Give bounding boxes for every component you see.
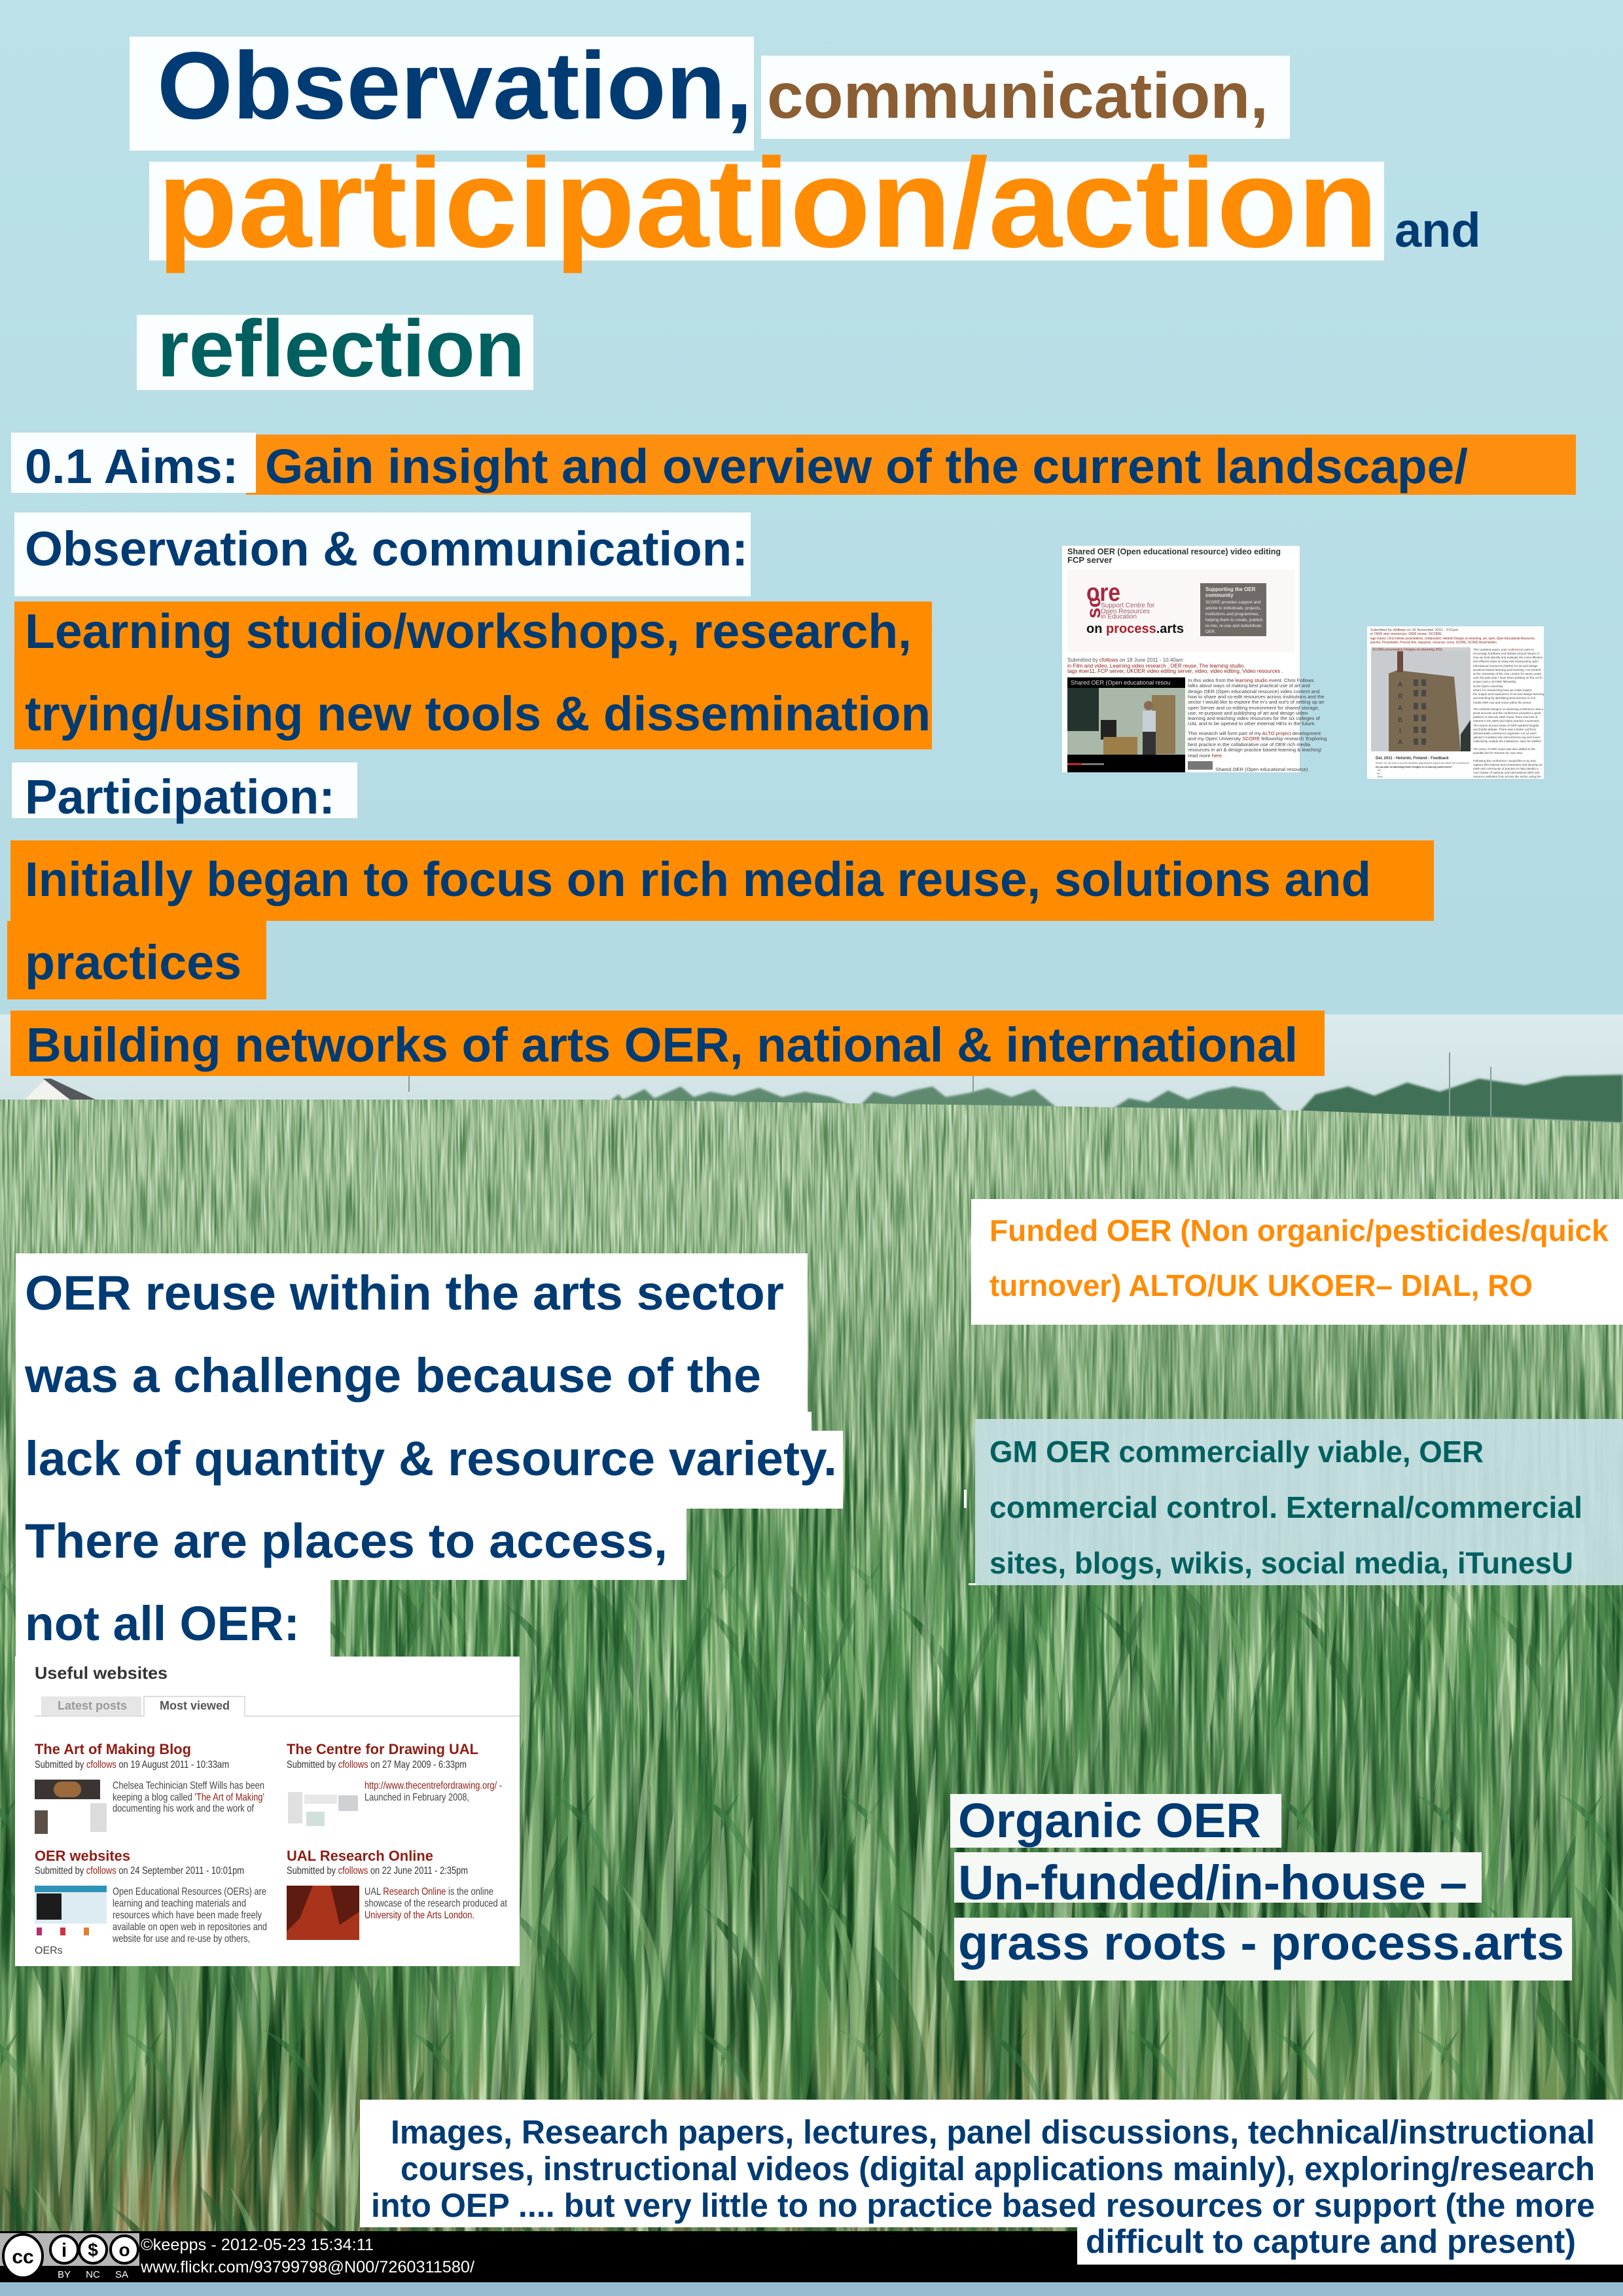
callout: GM OER: commercial control. External/commercial	[990, 1490, 1582, 1524]
photo credit text: ©keepps - 2012-05-23 15:34:11	[141, 2236, 374, 2254]
callout: bottom resources text: into OEP .... but very little to no practice based resources or support (the more	[371, 2187, 1595, 2224]
screenshot: shared OER video editing: ore	[1086, 579, 1120, 607]
callout: funded OER: Funded OER (Non organic/pesticides/quick	[990, 1213, 1609, 1247]
creative commons badge: SA	[115, 2269, 128, 2280]
panel heading: Useful websites	[35, 1663, 168, 1683]
title: Observation: Observation,	[157, 32, 753, 139]
screenshot: OER presentation Arabia tower: A	[1398, 739, 1402, 746]
screenshot: shared OER video editing: FCP server	[1067, 555, 1112, 565]
screenshot: OER presentation Arabia tower: possible list for Themes for next Year.	[1473, 751, 1523, 755]
screenshot: shared OER video editing: how to share and co-edit resources across institutions and the	[1188, 694, 1325, 700]
screenshot: OER presentation Arabia tower: Do you plan on attending future Designs on eLearning conferences?	[1376, 766, 1452, 768]
screenshot: OER presentation Arabia tower: B	[1398, 717, 1402, 724]
screenshot: OER presentation Arabia tower: This Updated paper, post conference) aims to	[1473, 648, 1534, 651]
screenshot: shared OER video editing: read more here.	[1188, 753, 1223, 759]
screenshot: OER presentation Arabia tower: and teaching by identifying best practice in rich	[1473, 696, 1536, 700]
photo credit text	[140, 2236, 474, 2276]
entry: art of making: The Art of Making Blog	[35, 1741, 191, 1757]
callout: bottom resources text: Images, Research papers, lectures, panel discussions, technical/instructional	[391, 2113, 1595, 2151]
poles	[409, 1052, 1491, 1119]
field base	[0, 1100, 1623, 2232]
screenshot: OER presentation Arabia tower: I	[1399, 728, 1401, 735]
callout: funded OER: turnover) ALTO/UK UKOER– DIAL, RO	[990, 1268, 1533, 1302]
screenshot: shared OER video editing: Support Centre for	[1101, 602, 1155, 609]
entry: OER websites: available on open web in repositories and	[113, 1922, 267, 1933]
entry: art of making: Submitted by cfollows on 19 August 2011 - 10:33am	[35, 1759, 229, 1770]
screenshot: shared OER video editing: community	[1205, 592, 1234, 598]
screenshot: OER presentation Arabia tower: SCORE presentation Designs on elearning 2011	[1372, 648, 1442, 652]
screenshot: OER presentation Arabia tower: project and a SCORE fellowship	[1473, 680, 1516, 683]
creative commons badge: $	[88, 2240, 98, 2260]
far field texture	[0, 1100, 1623, 1513]
screenshot: OER presentation Arabia tower: where I'm researching how we make explicit	[1473, 689, 1532, 692]
screenshot: OER presentation Arabia tower: R	[1398, 693, 1402, 700]
entry: centre for drawing: Submitted by cfollows on 27 May 2009 - 6:33pm	[287, 1759, 467, 1770]
callout: OER reuse challenge: was a challenge because of the	[24, 1348, 761, 1403]
callout: organic OER: Organic OER	[958, 1793, 1261, 1848]
entry: UAL research online: UAL Research Online	[287, 1848, 433, 1864]
entry: OER websites: learning and teaching materials and	[113, 1898, 246, 1909]
screenshot: OER presentation Arabia tower: encourage feedback and debate around issues of	[1473, 652, 1540, 655]
entry: art of making: documenting his work and the work of	[113, 1803, 254, 1814]
creative commons badge: i	[62, 2240, 67, 2261]
entry: OER websites: OERs	[35, 1945, 63, 1956]
entry: centre for drawing: The Centre for Drawing UAL	[287, 1741, 478, 1757]
creative commons badge	[0, 2233, 139, 2280]
learning studio text: trying/using new tools & dissemination	[25, 687, 931, 741]
screenshot: shared OER video editing	[1062, 546, 1327, 772]
screenshot: OER presentation Arabia tower: platform to discuss OER reuse, there was lots of	[1473, 715, 1538, 719]
callout: organic OER	[950, 1793, 1572, 1981]
aims text: Gain insight and overview of the current landscape/	[265, 439, 1468, 493]
tonal areas	[0, 1100, 1623, 2238]
screenshot: shared OER video editing: re-mix, re-use and redistribute	[1205, 624, 1262, 628]
entry: art of making: keeping a blog called 'The Art of Making'	[113, 1792, 264, 1803]
tabs: Latest posts	[58, 1699, 127, 1712]
screenshot: shared OER video editing: Shared OER (Open educational resou	[1071, 679, 1170, 686]
creative commons badge: NC	[86, 2269, 100, 2280]
screenshot: OER presentation Arabia tower: Del, 2011 - Helsinki, Finland - Feedback	[1376, 757, 1449, 761]
entry: UAL research online: UAL Research Online is the online	[365, 1886, 493, 1897]
screenshot: OER presentation Arabia tower: in OER arts resources, OER reuse, SCORE.	[1370, 632, 1443, 636]
screenshot: shared OER video editing: helping them to create, publish,	[1205, 618, 1264, 622]
screenshot: OER presentation Arabia tower: core cluster of national and international OER arts	[1473, 771, 1540, 774]
screenshot: shared OER video editing: SCORE provides support and	[1205, 600, 1261, 605]
callout: organic OER: Un-funded/in-house –	[958, 1856, 1467, 1910]
screenshot: OER presentation Arabia tower: collectively outside the institutions, said me #delhel	[1473, 740, 1541, 743]
screenshot: OER presentation Arabia tower: how we best identify and evaluate the most effective	[1473, 656, 1543, 659]
screenshot: shared OER video editing: sc	[1083, 597, 1105, 619]
screenshot: OER presentation Arabia tower: at the Open University	[1473, 685, 1503, 688]
title: communication: communication,	[767, 60, 1268, 132]
participation text: rich media reuse: Initially began to focus on rich media reuse, solutions and	[25, 852, 1371, 906]
tabs	[35, 1696, 520, 1716]
observation and communication heading	[14, 512, 751, 596]
near field texture	[0, 1636, 1623, 2232]
screenshot: shared OER video editing: advice to individuals, projects,	[1205, 606, 1261, 611]
screenshot: shared OER video editing: learning and teaching video resources for the six colleges of	[1188, 715, 1321, 721]
photo: wheat field	[0, 1014, 1623, 2238]
callout: bottom resources text	[360, 2100, 1623, 2265]
screenshot: OER presentation Arabia tower: A	[1398, 705, 1402, 712]
screenshot: shared OER video editing: in Education	[1101, 613, 1137, 620]
screenshot: shared OER video editing: UAL and to be opened to other external HEIs in the future.	[1188, 721, 1316, 726]
learning studio text	[14, 601, 932, 749]
aims	[11, 433, 1576, 495]
screenshot: OER presentation Arabia tower: upload 2 modules into oercommons.org and move	[1473, 736, 1541, 739]
entry: OER websites: website for use and re-use by others,	[112, 1933, 250, 1945]
house	[22, 1079, 98, 1102]
entry: OER websites: Open Educational Resources (OERs) are	[113, 1886, 266, 1897]
entry: centre for drawing	[287, 1741, 502, 1826]
screenshot: OER presentation Arabia tower: No	[1377, 772, 1380, 775]
distant trees	[605, 1075, 1623, 1123]
screenshot: shared OER video editing: talks about ways of making best practical use of art and	[1188, 683, 1310, 689]
screenshot: OER presentation Arabia tower: practiced based learning and teaching. I've worked	[1473, 668, 1541, 672]
screenshot: OER presentation Arabia tower: tags #ukoer, Chris Follows presentations, collaboration, Helsinki Designs on elearning, oer, open, Open Educational Resources,	[1370, 637, 1535, 641]
screenshot: OER presentation Arabia tower: Following the conference I would like to try and	[1473, 759, 1536, 762]
screenshot: OER presentation Arabia tower: over the past year I have been working on the ALTO	[1473, 676, 1543, 679]
screenshot: OER presentation Arabia tower: Other	[1377, 776, 1383, 778]
entry: centre for drawing: http://www.thecentrefordrawing.org/ -	[365, 1780, 502, 1791]
participation text: rich media reuse	[7, 840, 1434, 999]
creative commons badge: o	[118, 2240, 130, 2260]
callout: OER reuse challenge	[16, 1253, 843, 1657]
screenshot: shared OER video editing: In this video from the learning studio event, Chris Follows	[1188, 677, 1314, 683]
entry: UAL research online: Submitted by cfollows on 22 June 2011 - 2:35pm	[287, 1865, 468, 1876]
callout: OER reuse challenge: OER reuse within the arts sector	[25, 1266, 784, 1320]
bottom strip	[0, 2282, 1623, 2296]
screenshot: shared OER video editing: Submitted by cfollows on 18 June 2011 - 10:40am	[1067, 657, 1183, 663]
screenshot: OER presentation Arabia tower: The issues around reuse of OER sparked lengthy	[1473, 724, 1539, 727]
entry: UAL research online: showcase of the research produced at	[365, 1898, 507, 1909]
entry: OER websites: resources which have been made freely	[113, 1910, 262, 1921]
screenshot: shared OER video editing: on process.arts	[1086, 622, 1184, 636]
mid field texture	[0, 1289, 1623, 1852]
photo sky	[0, 1014, 1623, 1126]
screenshot: OER presentation Arabia tower: capture this interest and momentum and develop an	[1473, 763, 1543, 766]
tabs: Most viewed	[160, 1699, 230, 1712]
screenshot: OER presentation Arabia tower: The issue of OER reuse was also added to the	[1473, 747, 1535, 751]
screenshot: shared OER video editing: design OER (Open educational resource) video content and	[1188, 689, 1319, 694]
entry: UAL research online: University of the Arts London.	[365, 1910, 474, 1921]
callout: OER reuse challenge: not all OER:	[25, 1596, 300, 1651]
entry: art of making	[35, 1741, 264, 1834]
screenshot: OER presentation Arabia tower: resource websites from across the sector using the	[1473, 775, 1541, 778]
title: and: and	[1395, 203, 1481, 257]
screenshot: shared OER video editing: tags #oer11, FCP server, UKOER video editing server, video, video editing, Video resources .	[1067, 668, 1283, 674]
screenshot: OER presentation Arabia tower: media OER use and reuse within the sector.	[1473, 701, 1532, 704]
callout: bottom resources text: difficult to capture and present)	[1086, 2223, 1576, 2260]
callout: OER reuse challenge: There are places to access,	[25, 1514, 668, 1568]
title: reflection: reflection	[157, 304, 525, 394]
screenshot: OER presentation Arabia tower: interest in the OER and Open practice movement.	[1473, 719, 1540, 723]
screenshot: shared OER video editing: in Film and video, Learning video research , OER reuse, The learning studio.	[1067, 663, 1245, 669]
screenshot: OER presentation Arabia tower: OER arts community of practice to help identify a	[1473, 767, 1539, 770]
screenshot: shared OER video editing: Supporting the OER	[1205, 586, 1256, 592]
participation text: networks: Building networks of arts OER, national & international	[26, 1018, 1298, 1072]
screenshot: shared OER video editing: best practice in the collaborative use of OER rich media	[1188, 742, 1311, 747]
screenshot: shared OER video editing: open Server and co-editing environment for shared storage,	[1188, 705, 1319, 711]
callout: bottom resources text: courses, instructional videos (digital applications mainly), exploring/research	[401, 2150, 1595, 2187]
learning studio text: Learning studio/workshops, research,	[25, 604, 912, 658]
screenshot: OER presentation Arabia tower: @OwenKelly conference organiser 'Let us each	[1473, 732, 1537, 735]
screenshot: shared OER video editing: and my Open University SCORE fellowship research 'Exploring	[1188, 736, 1327, 742]
screenshot: OER presentation Arabia tower: the unique tacit experience of art and design learning	[1473, 692, 1544, 696]
entry: centre for drawing: Launched in February 2008,	[365, 1792, 469, 1803]
creative commons badge: BY	[58, 2269, 71, 2280]
screenshot: shared OER video editing: Shared OER (Open educational resource) video editing	[1067, 547, 1281, 556]
screenshot: OER presentation Arabia tower: and efficient ways of using and repurposing open	[1473, 660, 1539, 663]
title: participation/action: participation/action	[157, 132, 1378, 274]
callout: GM OER: GM OER commercially viable, OER	[990, 1435, 1484, 1469]
blades	[0, 1407, 1623, 2232]
callout: funded OER	[971, 1199, 1623, 1325]
screenshot: shared OER video editing: This research will form part of my ALTO project development	[1188, 730, 1321, 736]
soil patches	[112, 2083, 982, 2231]
panel: useful websites screenshot	[15, 1657, 520, 1966]
screenshot: OER presentation Arabia tower: The Helsinki Designs on elearning conference was a	[1473, 708, 1543, 711]
screenshot: OER presentation Arabia tower: Please use the form to provide feedback regarding the papers and future Del conferences	[1376, 762, 1469, 764]
observation and communication heading: Observation & communication:	[25, 522, 748, 576]
callout: GM OER: sites, blogs, wikis, social media, iTunesU	[990, 1546, 1573, 1580]
participation heading: Participation:	[25, 770, 335, 824]
screenshot: OER presentation Arabia tower: Yes	[1377, 769, 1381, 772]
callout: organic OER: grass roots - process.arts	[958, 1916, 1564, 1970]
screenshot: shared OER video editing: Open Resources	[1101, 608, 1150, 615]
photo credit text: www.flickr.com/93799798@N00/7260311580/	[140, 2258, 474, 2276]
screenshot: OER presentation Arabia tower: great success and the conference provided a great	[1473, 711, 1541, 715]
participation text: rich media reuse: practices	[25, 935, 241, 990]
screenshot: shared OER video editing: use, re-purpose and publishing of art and design video	[1188, 710, 1308, 716]
entry: UAL research online	[287, 1848, 507, 1940]
screenshot: OER presentation Arabia tower: educational resources (OERs) for art and design	[1473, 664, 1538, 668]
black photo credit bar	[0, 2231, 1623, 2282]
aims label: 0.1 Aims:	[25, 439, 238, 493]
screenshot: shared OER video editing: OER.	[1205, 630, 1216, 634]
entry: OER websites	[35, 1848, 267, 1956]
entry: art of making: Chelsea Techinician Steff Wills has been	[113, 1780, 264, 1791]
screenshot: OER presentation Arabia tower: Submitted by cfollows on 16 November 2011 - 3:01pm	[1370, 628, 1459, 632]
screenshot: OER presentation Arabia tower: A	[1398, 681, 1402, 689]
entry: OER websites: OER websites	[35, 1848, 130, 1864]
screenshot: shared OER video editing: resources in art & design practice based-learning & teaching'	[1188, 747, 1322, 753]
screenshot: shared OER video editing: sector I would like to explore the in's and out's of setting up an	[1188, 699, 1324, 705]
screenshot: OER presentation Arabia tower	[1367, 626, 1544, 779]
screenshot: OER presentation Arabia tower: at the University of the Arts London for seven years,	[1473, 672, 1542, 675]
screenshot: shared OER video editing: Shared OER (Open educational resource)	[1215, 766, 1308, 772]
entry: OER websites: Submitted by cfollows on 24 September 2011 - 10:01pm	[35, 1865, 244, 1876]
screenshot: OER presentation Arabia tower: practice, Presentation, Process Arts, repurpose, resources, reuse, SCORE, SCORE dissemination.	[1370, 641, 1497, 645]
callout: OER reuse challenge: lack of quantity & resource variety.	[25, 1431, 837, 1486]
creative commons badge: cc	[12, 2246, 34, 2268]
screenshot: OER presentation Arabia tower: and fruitful debate. There was a better call from	[1473, 728, 1536, 731]
screenshot: shared OER video editing: institutions and programmes,	[1205, 612, 1259, 617]
callout: GM OER	[964, 1419, 1623, 1585]
